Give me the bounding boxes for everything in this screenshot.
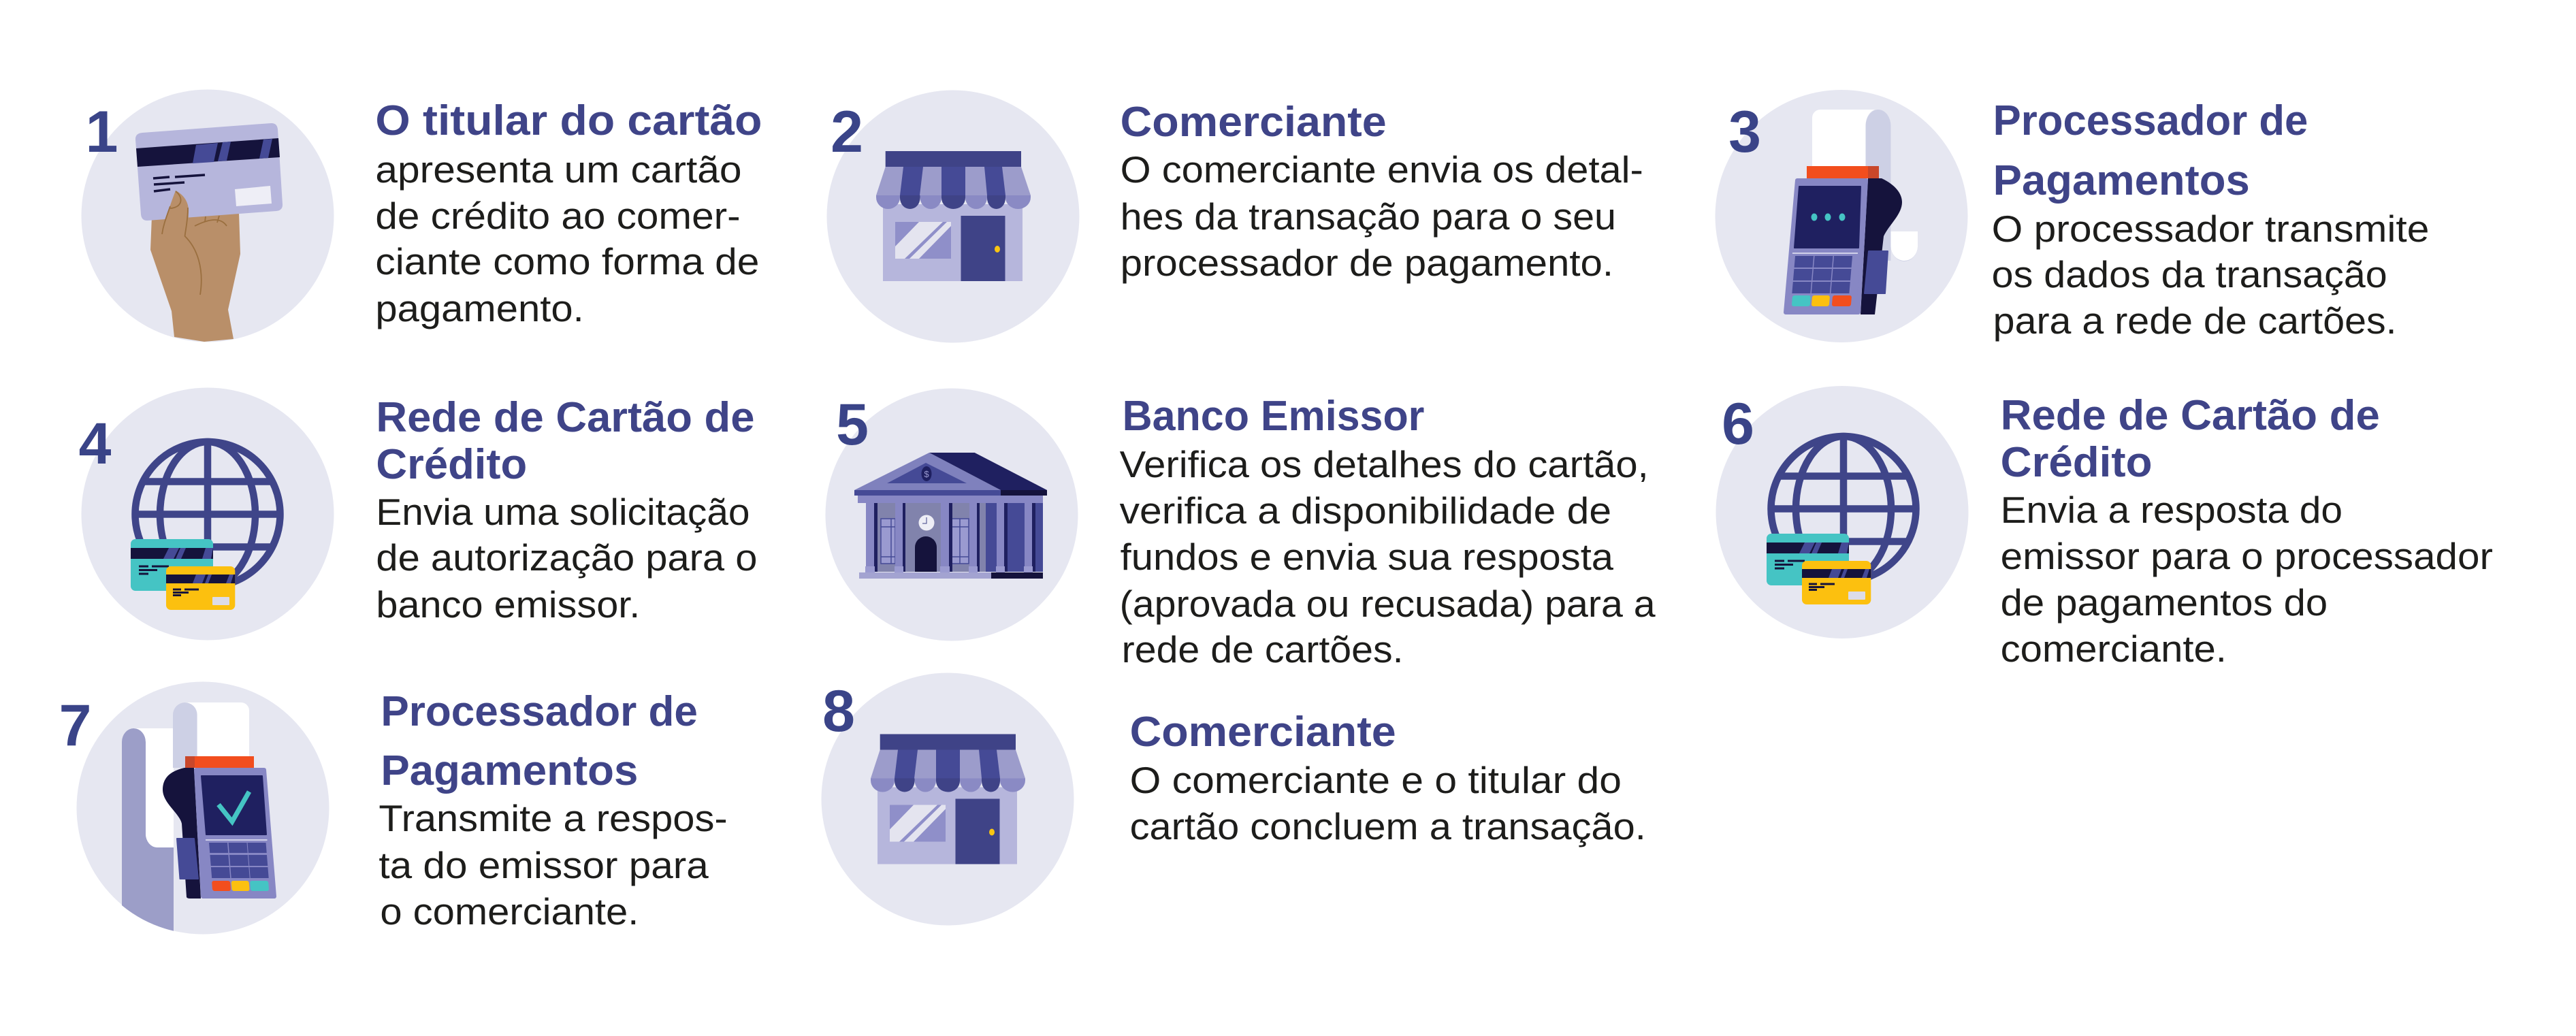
panel: step 4 card network xyxy=(79,388,757,640)
icon background circle xyxy=(82,90,334,342)
heading: Rede de Cartão de Crédito xyxy=(2001,392,2380,486)
body text step 1: ciante como forma de xyxy=(375,240,759,282)
body text step 7: o comerciante. xyxy=(380,890,639,933)
body text step 5: verifica a disponibilidade de xyxy=(1120,489,1611,532)
panel: step 5 issuing bank xyxy=(825,388,1656,670)
body text step 2: hes da transação para o seu xyxy=(1121,195,1616,238)
heading: Processador de Pagamentos: Pagamentos xyxy=(381,747,638,794)
body text step 3: para a rede de cartões. xyxy=(1993,300,2397,342)
body text step 5: Verifica os detalhes do cartão, xyxy=(1120,443,1649,485)
body text step 3 xyxy=(1992,208,2429,342)
body text step 2: processador de pagamento. xyxy=(1121,242,1613,284)
body text step 5 xyxy=(1120,443,1656,670)
icon background circle xyxy=(825,388,1078,641)
step number 3: 3 xyxy=(1728,99,1761,165)
body text step 3: os dados da transação xyxy=(1992,253,2387,295)
body text step 8: cartão concluem a transação. xyxy=(1130,805,1646,847)
icon background circle xyxy=(82,388,334,640)
icon: store xyxy=(871,734,1025,864)
body text step 1 xyxy=(375,148,759,329)
heading: Banco Emissor: Banco Emissor xyxy=(1123,393,1424,440)
heading: Rede de Cartão de Crédito: Crédito xyxy=(2001,439,2152,486)
body text step 7: ta do emissor para xyxy=(379,844,709,886)
step number 1: 1 xyxy=(86,99,118,165)
body text step 4 xyxy=(376,491,757,626)
body text step 8 xyxy=(1130,759,1646,847)
body text step 1: de crédito ao comer- xyxy=(375,195,741,237)
body text step 7 xyxy=(379,797,728,933)
panel: step 6 card network xyxy=(1716,386,2493,670)
body text step 1: apresenta um cartão xyxy=(375,148,742,191)
body text step 6: de pagamentos do xyxy=(2001,581,2328,624)
icon: globe with cards xyxy=(1767,436,1916,604)
step number 8: 8 xyxy=(822,679,855,744)
step number 2: 2 xyxy=(831,99,863,165)
body text step 4: banco emissor. xyxy=(376,583,640,626)
icon: card terminal with receipt xyxy=(1786,110,1918,314)
heading: O titular do cartão: O titular do cartão xyxy=(375,97,762,144)
heading: Rede de Cartão de Crédito: Rede de Cartão de xyxy=(376,394,754,441)
panel: step 2 merchant xyxy=(826,90,1643,343)
icon: bank building: $ xyxy=(924,469,929,479)
heading: Comerciante: Comerciante xyxy=(1121,99,1387,146)
panel: step 8 merchant xyxy=(821,673,1646,926)
body text step 4: Envia uma solicitação xyxy=(376,491,750,533)
icon background circle xyxy=(1716,386,1969,638)
body text step 6: comerciante. xyxy=(2001,628,2227,670)
panel: step 3 payment processor xyxy=(1716,90,2429,342)
icon: globe with cards xyxy=(131,442,280,610)
body text step 2 xyxy=(1121,148,1643,284)
body text step 2: O comerciante envia os detal- xyxy=(1121,148,1643,191)
body text step 1: pagamento. xyxy=(375,287,584,329)
body text step 5: (aprovada ou recusada) para a xyxy=(1120,583,1656,625)
icon background circle xyxy=(1716,90,1967,342)
icon background circle xyxy=(826,90,1080,343)
heading: Rede de Cartão de Crédito: Crédito xyxy=(376,441,527,488)
icon: store xyxy=(876,151,1031,281)
heading: Processador de Pagamentos xyxy=(1993,97,2308,204)
panel: step 1 cardholder xyxy=(82,90,762,342)
step number 4: 4 xyxy=(79,411,112,476)
icon: bank building xyxy=(854,453,1047,579)
icon: card terminal with approval check xyxy=(122,702,274,953)
heading: Processador de Pagamentos: Pagamentos xyxy=(1993,157,2250,204)
body text step 7: Transmite a respos- xyxy=(379,797,728,839)
body text step 4: de autorização para o xyxy=(376,536,757,579)
panel: step 7 payment processor xyxy=(59,682,728,953)
body text step 5: rede de cartões. xyxy=(1122,628,1404,670)
heading: Comerciante: Comerciante xyxy=(1130,709,1396,756)
heading: Rede de Cartão de Crédito: Rede de Cartão de xyxy=(2001,392,2380,439)
icon: hand holding credit card xyxy=(135,123,283,342)
body text step 5: fundos e envia sua resposta xyxy=(1121,536,1614,578)
body text step 8: O comerciante e o titular do xyxy=(1130,759,1622,801)
heading: Rede de Cartão de Crédito xyxy=(376,394,754,488)
body text step 6: emissor para o processador xyxy=(2001,535,2493,577)
step number 6: 6 xyxy=(1722,391,1754,457)
step number 5: 5 xyxy=(836,392,869,457)
body text step 3: O processador transmite xyxy=(1992,208,2429,250)
body text step 6 xyxy=(2001,489,2493,670)
body text step 6: Envia a resposta do xyxy=(2001,489,2342,531)
icon background circle xyxy=(76,682,329,934)
heading: Processador de Pagamentos: Processador de xyxy=(1993,97,2308,144)
step number 7: 7 xyxy=(59,693,91,758)
heading: Processador de Pagamentos xyxy=(381,688,698,794)
heading: Processador de Pagamentos: Processador de xyxy=(381,688,698,735)
icon background circle xyxy=(821,673,1074,926)
